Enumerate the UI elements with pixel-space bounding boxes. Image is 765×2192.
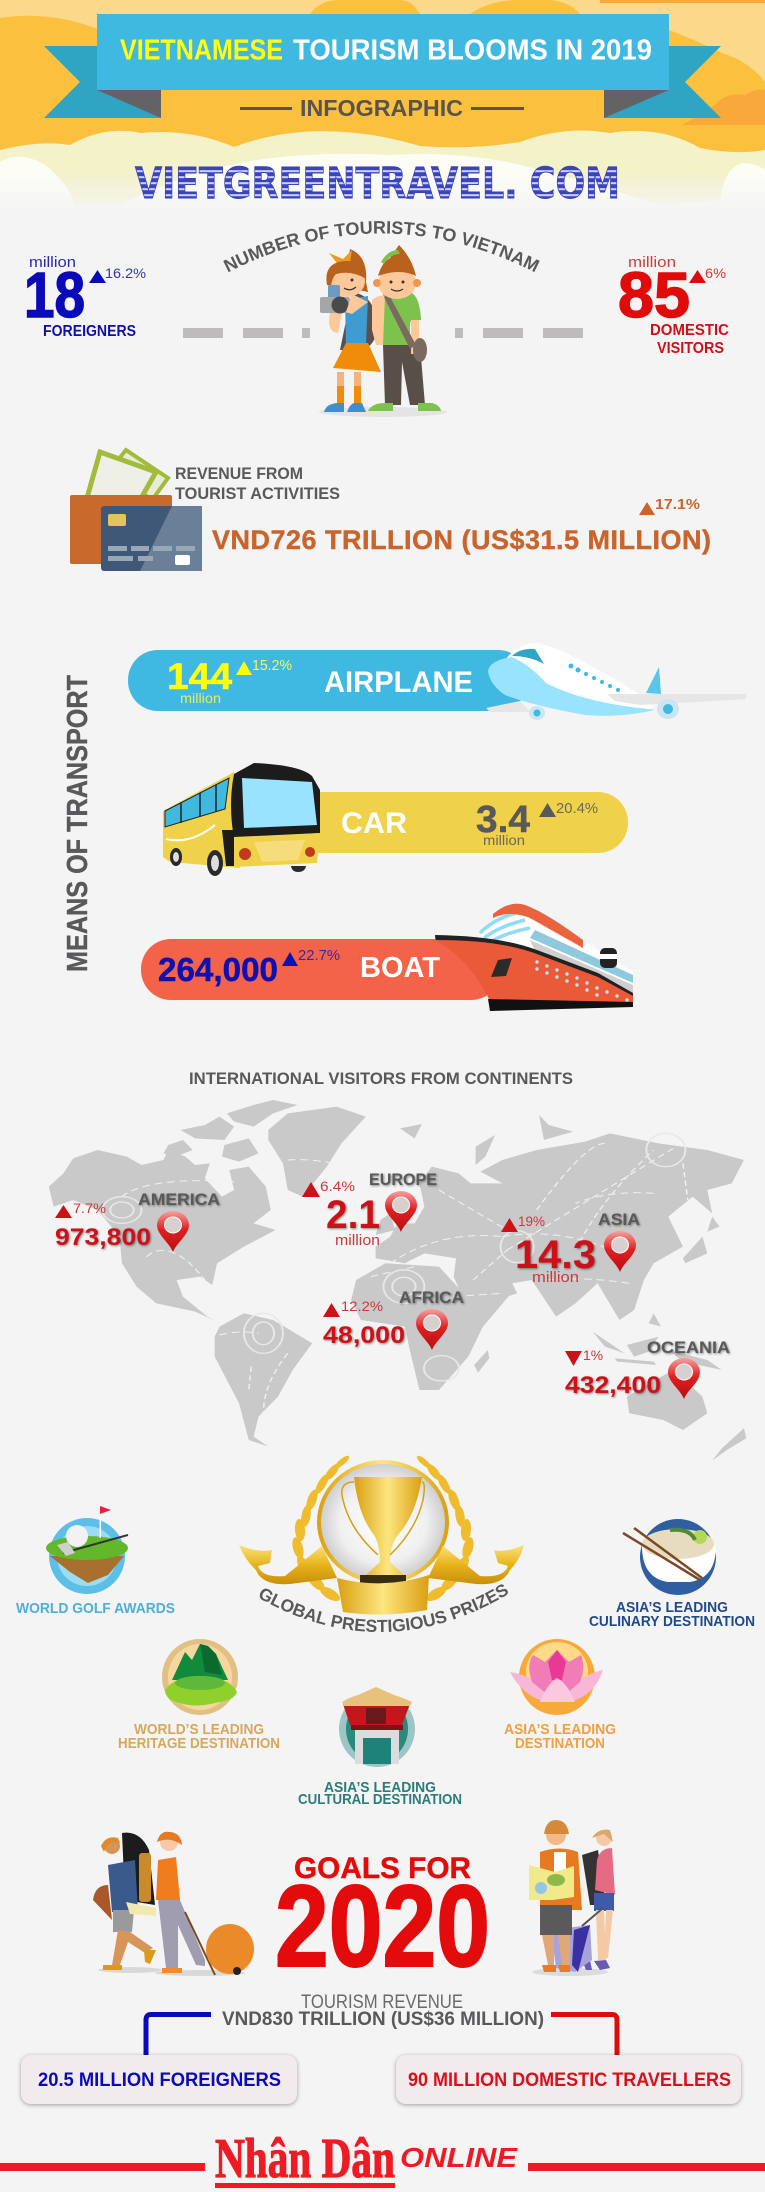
revenue growth	[639, 496, 700, 515]
heading: goals for 2020: 2020	[275, 1861, 490, 1991]
icon: airplane	[486, 643, 746, 720]
award: asia's leading destination: DESTINATION	[515, 1735, 605, 1752]
award: asia's leading destination: ASIA’S LEADING	[504, 1721, 616, 1738]
revenue label: TOURIST ACTIVITIES	[175, 484, 340, 503]
award: heritage destination: HERITAGE DESTINATION	[118, 1735, 280, 1752]
uk and japan	[376, 1213, 720, 1263]
goal box: domestic	[396, 2055, 741, 2104]
stat: foreigners	[24, 254, 146, 340]
stat: domestic visitors: million	[628, 254, 676, 271]
subtitle: infographic	[240, 95, 524, 121]
title text: VIETNAMESE	[120, 34, 283, 66]
map label: asia	[501, 1210, 640, 1286]
goal box: foreigners: 20.5 MILLION FOREIGNERS	[38, 2070, 281, 2091]
header background: sky and clouds	[0, 0, 765, 218]
award: culinary destination	[589, 1519, 755, 1630]
stat: domestic visitors: VISITORS	[657, 340, 724, 357]
revenue label: REVENUE FROM	[175, 464, 303, 483]
footer logo: Nhan Dan Online: ONLINE	[400, 2142, 518, 2173]
transport: boat bar	[141, 904, 633, 1011]
revenue target: VND830 TRILLION (US$36 MILLION)	[222, 2009, 544, 2030]
girl	[320, 249, 381, 412]
map label: europe: 2.1	[326, 1193, 380, 1237]
gold cup	[342, 1477, 424, 1585]
illustration: hikers with suitcase	[93, 1832, 254, 1976]
footer logo: Nhan Dan Online	[0, 2128, 765, 2190]
award: world golf awards	[16, 1506, 175, 1617]
award: culinary destination: CULINARY DESTINATION	[589, 1613, 755, 1630]
transport: airplane bar: AIRPLANE	[324, 666, 473, 699]
icon: bus	[163, 763, 320, 876]
icon: green mountains	[162, 1639, 238, 1715]
connector: domestic	[551, 2014, 617, 2055]
footer logo: Nhan Dan Online: Nhân Dân	[215, 2128, 395, 2190]
transport: airplane bar	[128, 643, 746, 720]
award: heritage destination	[118, 1639, 280, 1752]
stat: domestic visitors	[618, 254, 729, 357]
map label: asia: million	[532, 1269, 579, 1286]
award: asia's leading destination	[504, 1639, 616, 1752]
transport: airplane bar: 144	[167, 656, 232, 697]
transport: airplane bar: million	[180, 690, 221, 706]
icon: golf island	[46, 1506, 128, 1594]
revenue value: VND726 TRILLION (US$31.5 MILLION)	[212, 525, 711, 555]
stat: foreigners: million	[29, 254, 76, 271]
route lines	[122, 1143, 688, 1413]
medallion	[317, 1460, 449, 1584]
transport: car bar: 3.4	[476, 799, 530, 841]
indonesia and islands	[593, 1313, 722, 1370]
heading arc: GLOBAL PRESTIGIOUS PRIZES	[260, 1584, 508, 1632]
map label: asia: ASIA	[598, 1210, 640, 1229]
icon: wallet with money and card	[70, 450, 202, 571]
transport: car bar: CAR	[341, 807, 407, 840]
map label: asia: 14.3	[515, 1233, 596, 1277]
icon: lotus	[510, 1639, 603, 1715]
revenue target: TOURISM REVENUE	[301, 1992, 463, 2013]
map label: africa	[323, 1288, 464, 1350]
stat: foreigners: 18	[24, 259, 85, 331]
award: world golf awards: WORLD GOLF AWARDS	[16, 1600, 175, 1617]
heading: number of tourists: NUMBER OF TOURISTS TO VIETNAM	[223, 221, 540, 272]
transport: car bar	[163, 763, 628, 876]
stat: domestic visitors: 6%	[705, 265, 726, 281]
north america	[49, 1150, 276, 1322]
south america	[215, 1313, 312, 1447]
transport: car bar: 20.4%	[556, 800, 598, 817]
map label: oceania: 432,400	[565, 1372, 661, 1399]
transport: boat bar: 22.7%	[298, 947, 340, 964]
map label: africa: AFRICA	[399, 1288, 464, 1307]
map label: europe	[302, 1170, 437, 1249]
award: cultural destination: ASIA’S LEADING	[324, 1779, 436, 1796]
illustration: couple with map	[529, 1820, 615, 1976]
icon: cruise ship	[435, 904, 633, 1011]
laurel wreath	[290, 1454, 476, 1604]
centre banner	[337, 1575, 429, 1615]
stat: foreigners: FOREIGNERS	[43, 323, 136, 340]
map label: asia: 19%	[518, 1213, 545, 1229]
award: cultural destination	[298, 1687, 462, 1808]
map label: oceania	[565, 1338, 730, 1399]
map label: africa: 12.2%	[341, 1298, 383, 1314]
stat: domestic visitors: 85	[618, 259, 690, 331]
trophy emblem	[239, 1456, 524, 1632]
transport: boat bar: 264,000	[158, 951, 278, 988]
icon: pho bowl	[623, 1519, 716, 1595]
map label: europe: million	[335, 1232, 380, 1249]
heading: international visitors: INTERNATIONAL VISITORS FROM CONTINENTS	[189, 1070, 573, 1088]
revenue target	[222, 1992, 544, 2030]
icon: temple gate	[339, 1687, 415, 1767]
award: cultural destination: CULTURAL DESTINATION	[298, 1791, 462, 1808]
goal box: domestic: 90 MILLION DOMESTIC TRAVELLERS	[408, 2070, 731, 2091]
award: culinary destination: ASIA’S LEADING	[616, 1599, 728, 1616]
australia	[627, 1370, 707, 1430]
map label: america: 973,800	[55, 1224, 151, 1251]
map label: europe: EUROPE	[369, 1170, 437, 1189]
illustration: two tourists	[319, 245, 447, 417]
madagascar	[474, 1350, 489, 1373]
russian arctic islands	[400, 1115, 573, 1165]
stat: foreigners: 16.2%	[105, 265, 146, 281]
map label: america: 7.7%	[73, 1200, 106, 1216]
transport: boat bar: BOAT	[360, 952, 440, 984]
stat: domestic visitors: DOMESTIC	[650, 322, 729, 339]
location rings	[102, 1133, 685, 1381]
world map	[49, 1100, 746, 1461]
title banner	[44, 14, 721, 118]
goal box: foreigners	[21, 2055, 297, 2104]
boy	[368, 245, 441, 411]
transport: airplane bar: 15.2%	[252, 657, 292, 674]
transport: car bar: million	[483, 832, 525, 848]
greenland	[268, 1107, 366, 1197]
award: heritage destination: WORLD’S LEADING	[134, 1721, 264, 1738]
arctic islands	[163, 1100, 298, 1162]
section: revenue	[70, 450, 711, 571]
africa	[351, 1263, 510, 1390]
title text: TOURISM BLOOMS IN 2019	[293, 34, 652, 66]
map label: america: AMERICA	[138, 1190, 220, 1209]
map label: oceania: OCEANIA	[647, 1338, 730, 1357]
map label: europe: 6.4%	[320, 1178, 355, 1194]
new zealand	[712, 1428, 746, 1461]
map label: oceania: 1%	[583, 1347, 603, 1363]
connector: foreigners	[146, 2014, 211, 2055]
heading: goals for 2020: GOALS FOR	[294, 1852, 471, 1885]
map label: africa: 48,000	[323, 1322, 405, 1349]
website watermark: VIETGREENTRAVEL. COM	[135, 159, 620, 209]
dashed road line	[183, 328, 583, 338]
map label: america	[55, 1190, 220, 1252]
revenue growth: 17.1%	[655, 496, 700, 513]
subtitle: infographic: INFOGRAPHIC	[300, 95, 463, 121]
eurasia	[376, 1133, 744, 1320]
side ribbons	[239, 1545, 337, 1584]
vertical label: means of transport: MEANS OF TRANSPORT	[62, 675, 94, 972]
